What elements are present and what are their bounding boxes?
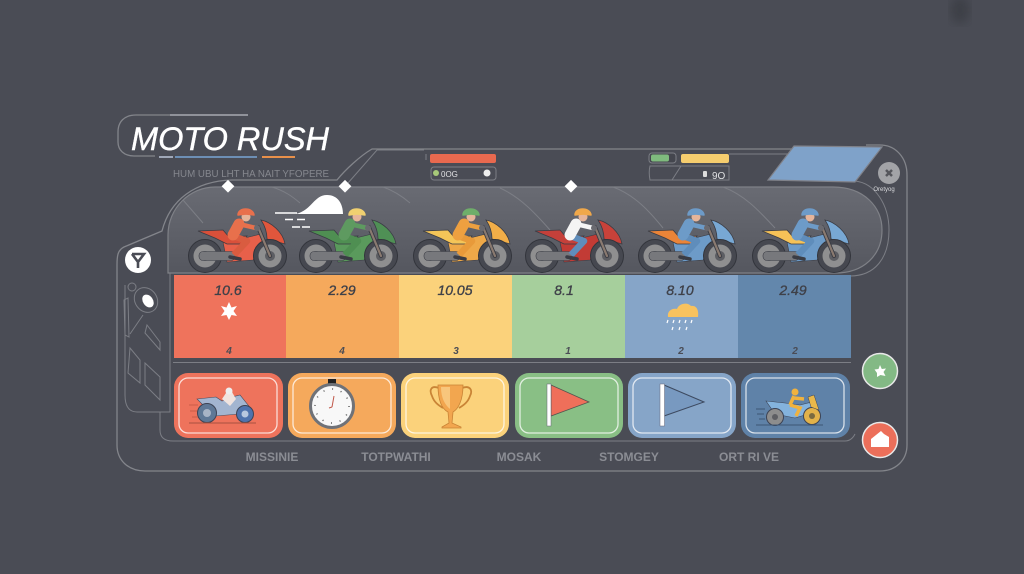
bar 3 bbox=[399, 275, 512, 358]
icon: stopwatch bbox=[310, 379, 354, 428]
icon: trophy bbox=[431, 385, 471, 428]
card: red flag bbox=[515, 373, 623, 438]
card: rider bbox=[741, 373, 850, 438]
settings button: Oretyog bbox=[873, 187, 895, 193]
footer labels: TOTPWATHI bbox=[361, 450, 431, 464]
card: blue flag bbox=[628, 373, 736, 438]
bar 1 bbox=[174, 275, 286, 358]
dashboard outer frame bbox=[117, 145, 907, 471]
bar 5: 2 bbox=[677, 346, 684, 357]
stats bars bbox=[174, 275, 851, 358]
left key icon bbox=[125, 247, 151, 273]
icon: red flag bbox=[547, 384, 589, 426]
left decorative glyphs bbox=[124, 283, 162, 400]
icon: rain cloud bbox=[667, 304, 698, 330]
bar 5: 8.10 bbox=[666, 282, 694, 298]
bike 6: blue and yellow bbox=[752, 209, 850, 272]
top status pill: green and yellow: 9O bbox=[712, 171, 726, 182]
top status pill: red: 0OG bbox=[441, 170, 458, 179]
bar 5 bbox=[625, 275, 738, 358]
bar 2 bbox=[286, 275, 399, 358]
footer labels: MOSAK bbox=[497, 450, 542, 464]
bike 3: yellow bbox=[414, 209, 512, 272]
icon: blue bike bbox=[189, 388, 256, 423]
bike 1: red bbox=[188, 209, 286, 272]
bar 2: 4 bbox=[338, 346, 345, 357]
subtitle: HUM UBU LHT HA NAIT YFOPERE bbox=[173, 168, 329, 180]
bar 2: 2.29 bbox=[327, 282, 356, 298]
top status pill: red bbox=[426, 154, 496, 180]
bar 1: 10.6 bbox=[214, 282, 242, 298]
side button: home bbox=[862, 422, 898, 458]
blue parallelogram bbox=[768, 146, 882, 182]
bar 6: 2 bbox=[791, 346, 798, 357]
track panel bbox=[168, 187, 882, 273]
side button: star bbox=[862, 354, 898, 388]
bar 4 bbox=[512, 275, 625, 358]
card: trophy bbox=[401, 373, 509, 438]
card: stopwatch bbox=[288, 373, 396, 438]
bike 4: crimson bbox=[526, 209, 624, 272]
footer labels: MISSINIE bbox=[246, 450, 298, 464]
bar 4: 8.1 bbox=[554, 282, 574, 298]
bar 6 bbox=[738, 275, 851, 358]
footer labels: STOMGEY bbox=[599, 450, 659, 464]
top status pill: green and yellow bbox=[649, 153, 795, 182]
bar 3: 3 bbox=[453, 346, 459, 357]
card row bbox=[174, 373, 850, 438]
card: motorcycle bbox=[174, 373, 283, 438]
bike 2: green bbox=[300, 209, 398, 272]
icon: yellow bike bbox=[756, 388, 823, 426]
title: MOTO RUSH bbox=[131, 121, 330, 157]
bar 4: 1 bbox=[565, 346, 571, 357]
settings button bbox=[873, 162, 900, 193]
footer labels bbox=[246, 450, 779, 464]
bar 1: 4 bbox=[225, 346, 232, 357]
speed swoosh bbox=[275, 195, 343, 227]
footer labels: ORT RI VE bbox=[719, 450, 779, 464]
bar 3: 10.05 bbox=[437, 282, 473, 298]
bar 6: 2.49 bbox=[778, 282, 807, 298]
bike 5: blue and orange bbox=[638, 209, 736, 272]
icon: blue flag bbox=[660, 384, 704, 426]
marker diamonds bbox=[222, 180, 577, 193]
